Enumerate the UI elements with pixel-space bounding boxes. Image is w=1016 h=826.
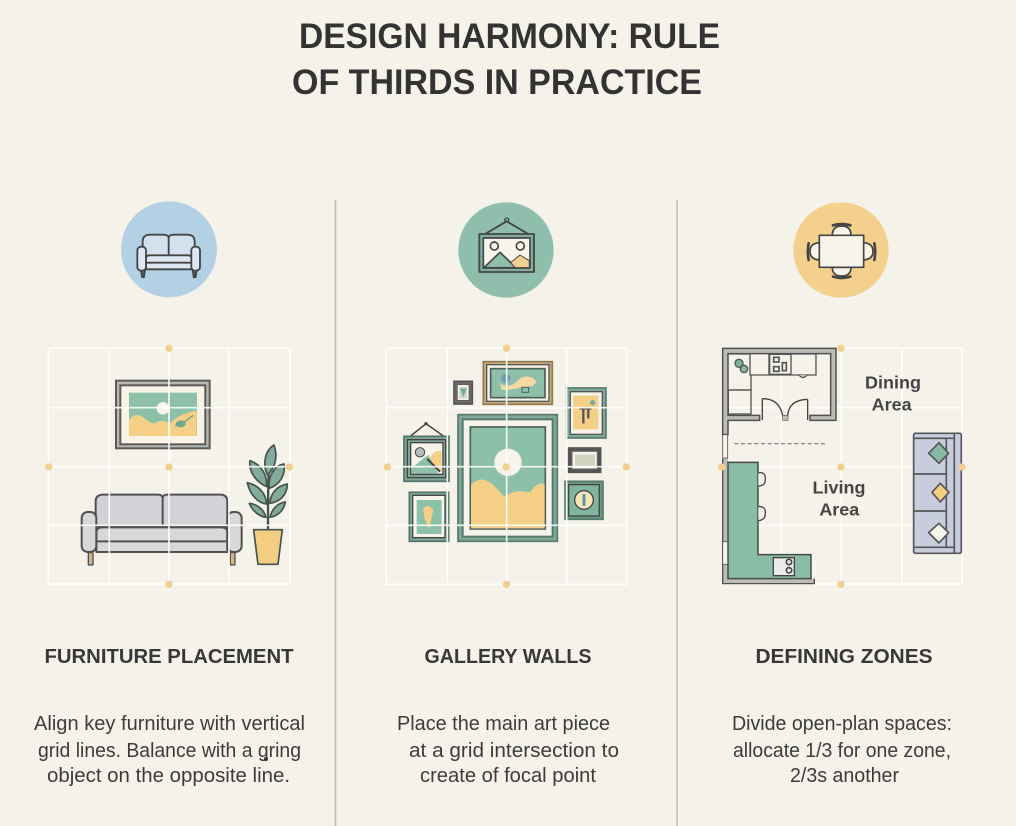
panel: gallery wall diagram xyxy=(384,345,630,588)
heading: furniture placement: FURNITURE PLACEMENT xyxy=(44,646,294,668)
sofa xyxy=(82,495,242,565)
rule of thirds grid xyxy=(48,348,290,584)
rule of thirds grid xyxy=(386,348,627,584)
text: gallery body: at a grid intersection to xyxy=(409,740,619,762)
right top frame xyxy=(567,388,606,438)
intersection dots xyxy=(45,345,293,588)
heading: gallery walls: GALLERY WALLS xyxy=(424,646,592,668)
label: living area: Living xyxy=(813,477,865,497)
intersection dots xyxy=(384,345,630,588)
heading: defining zones: DEFINING ZONES xyxy=(756,646,932,668)
text: furniture body: grid lines. Balance with a gring xyxy=(38,740,301,762)
right middle frame xyxy=(569,448,601,472)
text: zones body: Divide open-plan spaces: xyxy=(732,713,952,735)
label: living area: Area xyxy=(819,499,860,519)
icon: dining table in yellow circle xyxy=(793,202,889,298)
text: gallery body: create of focal point xyxy=(420,765,596,787)
small frame xyxy=(454,381,472,404)
text: gallery body: Place the main art piece xyxy=(397,713,610,735)
icon: sofa in blue circle xyxy=(121,201,217,297)
icon: framed picture in green circle xyxy=(458,202,554,298)
title: OF THIRDS IN PRACTICE xyxy=(292,63,702,102)
text: zones body xyxy=(732,713,952,787)
hanging frame xyxy=(404,422,449,481)
label: dining area xyxy=(865,373,921,415)
potted plant xyxy=(247,445,287,564)
text: furniture body xyxy=(34,713,305,787)
zone divider xyxy=(734,442,825,445)
text: furniture body: Align key furniture with vertical xyxy=(34,713,305,735)
label: dining area: Area xyxy=(872,395,913,415)
kitchen walls xyxy=(723,348,836,435)
rule of thirds grid xyxy=(723,348,962,584)
kitchen counter xyxy=(723,435,814,584)
text: zones body: allocate 1/3 for one zone, xyxy=(733,740,951,762)
text: gallery body xyxy=(397,713,619,787)
main art piece xyxy=(458,415,557,541)
top frame xyxy=(483,362,552,404)
text: furniture body: object on the opposite line. xyxy=(47,765,290,787)
text: zones body: 2/3s another xyxy=(790,765,899,787)
side sofa xyxy=(914,433,961,553)
title: DESIGN HARMONY: RULE xyxy=(299,17,720,56)
panel: furniture placement diagram xyxy=(45,345,293,588)
label: living area xyxy=(813,477,865,519)
title xyxy=(292,17,720,102)
lower left frame xyxy=(409,492,449,541)
label: dining area: Dining xyxy=(865,373,921,393)
framed picture xyxy=(116,381,210,448)
intersection dots xyxy=(718,345,966,588)
right lower frame xyxy=(565,481,603,519)
panel: defining zones floor plan xyxy=(718,345,966,588)
